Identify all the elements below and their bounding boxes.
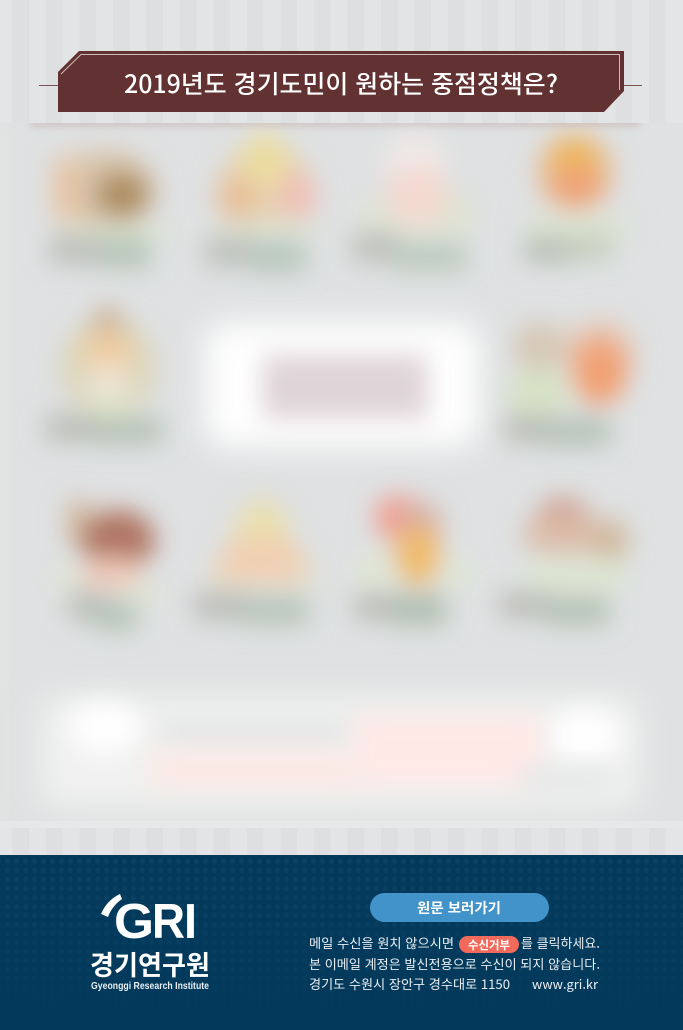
blurred item: bottom message box bbox=[40, 696, 640, 808]
blurred item: row 3 column 4 bbox=[500, 497, 629, 625]
button: unsubscribe bbox=[459, 936, 519, 953]
title banner rule bbox=[39, 85, 642, 86]
blurred item: row 1 column 2 bbox=[205, 133, 320, 272]
GRI logo: I bbox=[184, 895, 197, 949]
GRI logo bbox=[90, 894, 210, 992]
logo Korean name: 경기연구원 bbox=[90, 944, 210, 983]
blurred item: row 3 column 2 bbox=[194, 492, 318, 625]
bottom striped band bbox=[0, 828, 683, 855]
unsubscribe notice text: 메일 수신을 원치 않으시면 bbox=[309, 933, 454, 952]
unsubscribe notice text: 경기도 수원시 장안구 경수대로 1150 bbox=[309, 974, 510, 993]
unsubscribe notice text: 를 클릭하세요. bbox=[521, 933, 600, 952]
blurred item: row 3 column 3 bbox=[354, 495, 474, 625]
blurred item: row 1 column 3 bbox=[352, 134, 471, 270]
unsubscribe notice text bbox=[309, 933, 600, 993]
blurred item: row 1 column 4 bbox=[525, 132, 630, 262]
blurred item: row 2 column 4 bbox=[505, 321, 635, 446]
button: unsubscribe: 수신거부 bbox=[468, 937, 510, 953]
blurred item: row 2 column 1 bbox=[46, 307, 162, 444]
blurred content area bbox=[29, 123, 646, 826]
logo English name: Gyeonggi Research Institute bbox=[91, 981, 209, 992]
button: view original: 원문 보러가기 bbox=[417, 898, 501, 918]
unsubscribe notice text: www.gri.kr bbox=[532, 974, 599, 993]
GRI logo: G bbox=[114, 895, 154, 949]
blurred item: row 3 column 1 bbox=[56, 500, 159, 630]
title banner bbox=[58, 51, 624, 112]
title: 2019년도 경기도민이 원하는 중점정책은? bbox=[124, 65, 558, 101]
blurred item: row 1 column 1 bbox=[50, 150, 170, 268]
GRI logo: R bbox=[152, 895, 185, 949]
blurred item: center white callout bbox=[205, 322, 480, 447]
button: view original bbox=[370, 893, 549, 922]
footer panel bbox=[0, 855, 683, 1030]
unsubscribe notice text: 본 이메일 계정은 발신전용으로 수신이 되지 않습니다. bbox=[309, 954, 600, 973]
striped header band bbox=[0, 0, 683, 123]
